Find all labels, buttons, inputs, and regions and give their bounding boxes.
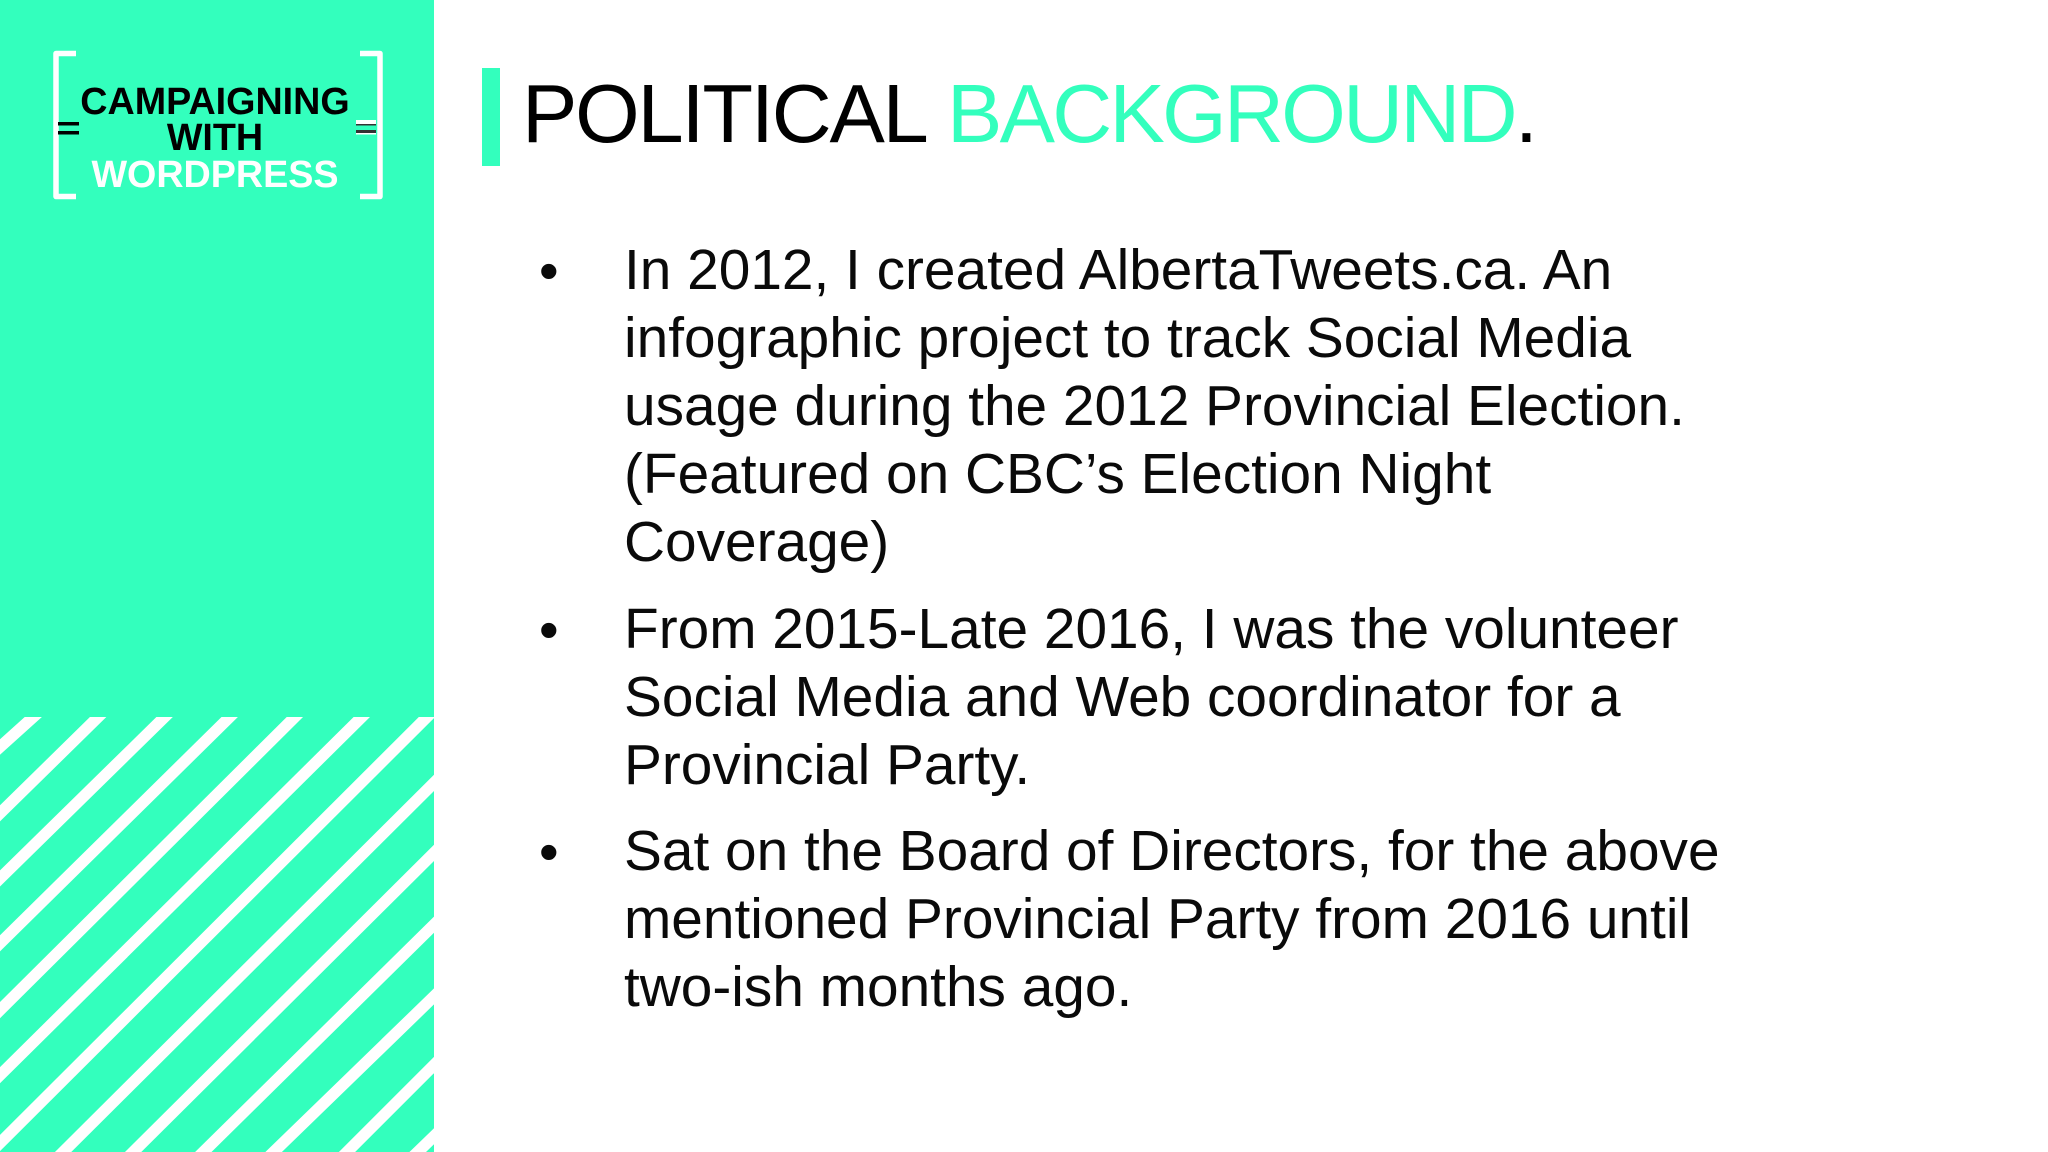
title accent bar — [482, 68, 500, 166]
bullet 1: • — [539, 239, 559, 302]
bullet 3 — [539, 820, 1720, 1019]
bullet 1: In 2012, I created AlbertaTweets.ca. An — [624, 239, 1612, 302]
title: POLITICAL BACKGROUND. — [522, 67, 1536, 160]
bullet 1 — [539, 239, 1685, 574]
panel: left sidebar — [0, 0, 434, 1152]
bullet 1: Coverage) — [624, 511, 889, 574]
bullet 3: Sat on the Board of Directors, for the above — [624, 820, 1720, 883]
bullet 1: usage during the 2012 Provincial Election. — [624, 375, 1685, 438]
bullet 2: Provincial Party. — [624, 734, 1030, 797]
bullet 2 — [539, 598, 1679, 797]
stripe pattern — [0, 717, 434, 1152]
bullet 2: From 2015-Late 2016, I was the volunteer — [624, 598, 1679, 661]
icon: brackets and equals marks — [53, 50, 383, 200]
bullet 1: (Featured on CBC’s Election Night — [624, 443, 1491, 506]
logo: campaigning with wordpress — [53, 50, 383, 200]
bullet 3: • — [539, 820, 559, 883]
bullet 3: mentioned Provincial Party from 2016 until — [624, 888, 1691, 951]
logo line 3: WORDPRESS — [91, 153, 339, 195]
bullet 1: infographic project to track Social Media — [624, 307, 1631, 370]
bullet 2: • — [539, 598, 559, 661]
logo line 1: CAMPAIGNING — [80, 80, 350, 122]
bullet 3: two-ish months ago. — [624, 956, 1132, 1019]
logo line 2: WITH — [167, 116, 263, 158]
bullet 2: Social Media and Web coordinator for a — [624, 666, 1621, 729]
